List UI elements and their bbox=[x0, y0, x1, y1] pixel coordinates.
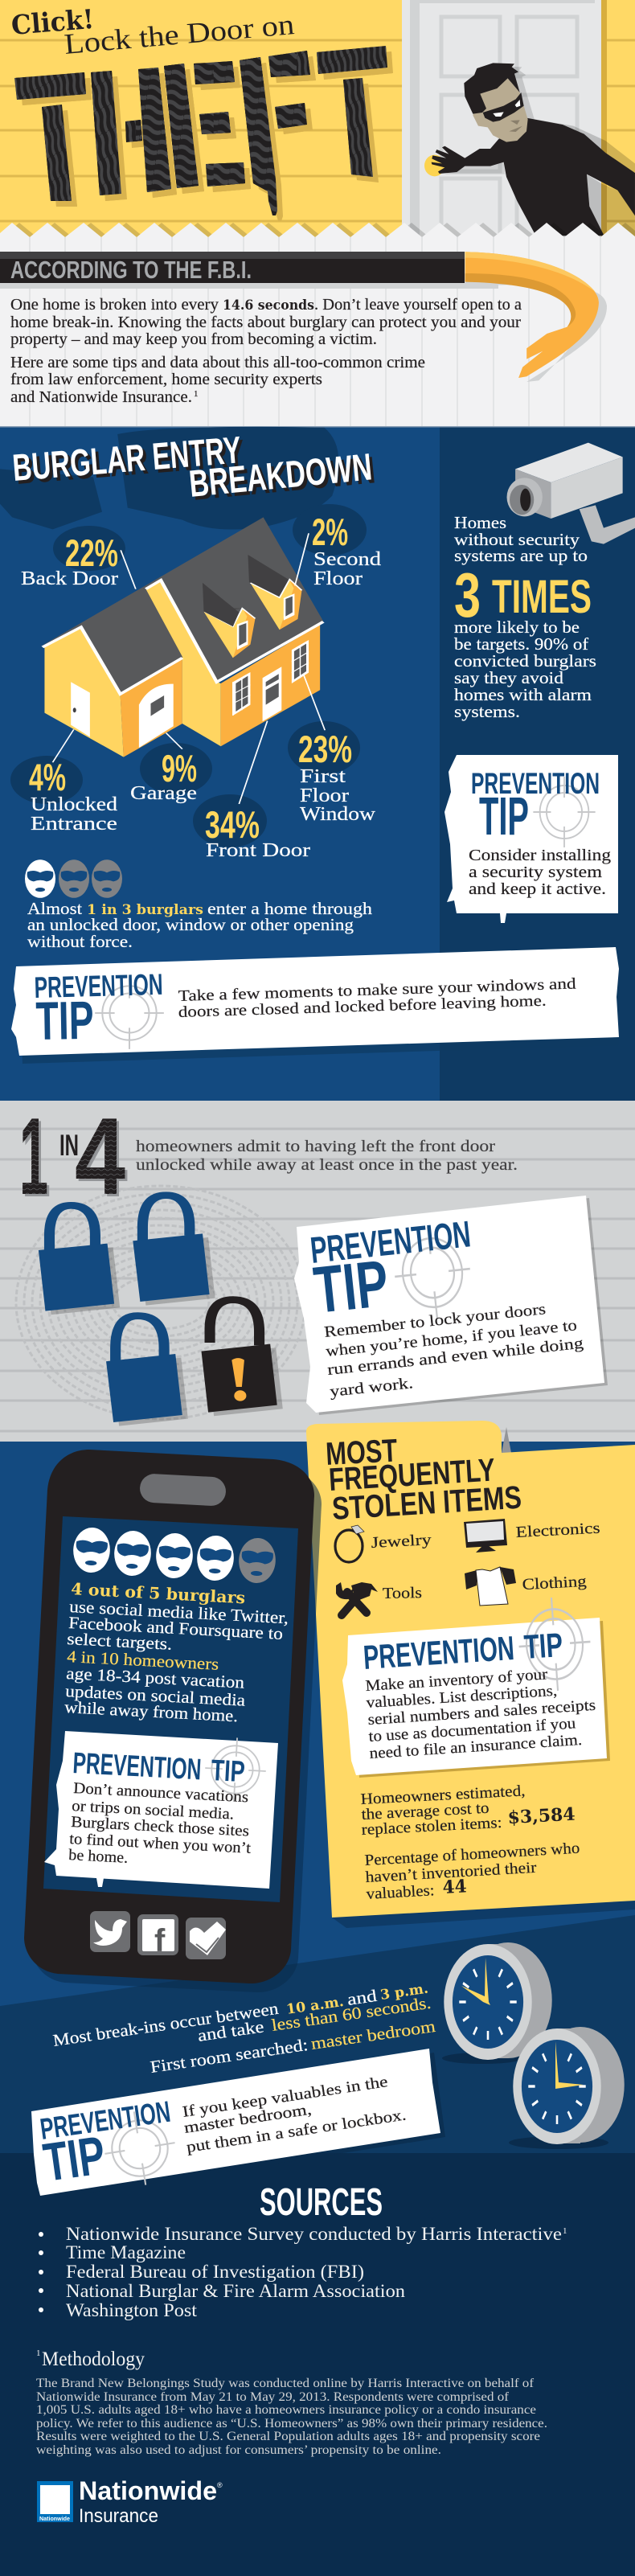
panel: prevention tip lock your doors: PREVENTION bbox=[309, 1212, 473, 1271]
entry point labels: Back Door bbox=[21, 568, 118, 589]
big number: 1 in 4 bbox=[19, 1095, 128, 1220]
text block: 3 times: systems. bbox=[454, 702, 520, 721]
big number: 1 in 4: 1 bbox=[19, 1095, 48, 1217]
text block: methodology: 1,005 U.S. adults aged 18+ who have a homeowners insurance policy or a condo insurance bbox=[36, 2403, 536, 2417]
panel: prevention tip lock your doors: yard work. bbox=[329, 1375, 414, 1401]
text block: percentage not inventoried: Percentage of homeowners who bbox=[364, 1840, 580, 1869]
text block: break-ins timing: First room searched: bbox=[149, 2035, 309, 2077]
text block: percentage not inventoried: valuables: bbox=[366, 1882, 435, 1903]
logo: Nationwide Insurance: Nationwide bbox=[39, 2517, 70, 2522]
text block: intro: and Nationwide Insurance. bbox=[10, 389, 192, 406]
heading: most frequently stolen items: STOLEN ITEMS bbox=[331, 1480, 522, 1527]
stolen item icons and labels: Tools bbox=[383, 1585, 422, 1602]
icon row: burglar masks 4 of 5 bbox=[72, 1527, 277, 1584]
panel: prevention tip windows and doors: doors are closed and locked before leaving home. bbox=[178, 993, 547, 1021]
panel: prevention tip safe or lockbox: put them in a safe or lockbox. bbox=[186, 2106, 408, 2156]
entry point labels: Second bbox=[313, 549, 381, 570]
title: THEFT: T bbox=[21, 49, 91, 248]
text block: 3 times: homes with alarm bbox=[454, 685, 592, 704]
text block: intro bbox=[10, 297, 522, 406]
panel: prevention tip inventory: need to file an insurance claim. bbox=[369, 1732, 583, 1762]
text block: social media: select targets. bbox=[67, 1629, 173, 1654]
text block: intro: property – and may keep you from becoming a victim. bbox=[10, 331, 377, 348]
list: sources: Washington Post bbox=[66, 2300, 198, 2320]
text block: break-ins timing: less than 60 seconds. bbox=[270, 1993, 432, 2035]
text block: social media: updates on social media bbox=[65, 1681, 246, 1710]
panel: prevention tip vacations: to find out when you won’t bbox=[69, 1831, 252, 1857]
heading: Burglar Entry Breakdown: BURGLAR ENTRY bbox=[14, 431, 246, 492]
big number: 1 in 4: 4 bbox=[77, 1097, 128, 1220]
text block: cost to replace bbox=[360, 1782, 576, 1839]
text block: cost to replace: replace stolen items: bbox=[361, 1815, 502, 1839]
text block: 3 times: systems are up to bbox=[454, 546, 588, 565]
list: sources: Federal Bureau of Investigation (FBI) bbox=[66, 2262, 364, 2282]
entry point labels: Entrance bbox=[31, 814, 117, 835]
title: THEFT: H bbox=[86, 39, 186, 242]
panel: prevention tip windows and doors: Take a few moments to make sure your windows and bbox=[178, 975, 576, 1005]
panel: prevention tip safe or lockbox: PREVENTION bbox=[38, 2095, 173, 2146]
panel: 1 in 4 grey siding background bbox=[0, 1101, 635, 1442]
panel: prevention tip inventory: serial numbers and sales receipts bbox=[367, 1697, 596, 1729]
text block: homeowners admit: unlocked while away at least once in the past year. bbox=[136, 1157, 518, 1174]
icons: twitter, facebook, foursquare bbox=[93, 1919, 226, 1959]
heading: Burglar Entry Breakdown: BREAKDOWN bbox=[187, 445, 374, 505]
percentage labels: 2% bbox=[312, 511, 348, 553]
list: sources: National Burglar & Fire Alarm Association bbox=[66, 2281, 406, 2301]
text block: break-ins timing bbox=[51, 1981, 436, 2077]
title: THEFT bbox=[14, 46, 393, 220]
text block: 1 in 3 burglars: enter a home through bbox=[207, 899, 373, 918]
panel: prevention tip windows and doors: TIP bbox=[35, 991, 94, 1052]
title: THEFT: T bbox=[15, 43, 85, 242]
list: sources: Time Magazine bbox=[66, 2242, 186, 2262]
big number: 1 in 4: 1 bbox=[22, 1097, 51, 1220]
stolen item icons and labels bbox=[335, 1519, 600, 1615]
panel: prevention tip vacations bbox=[44, 1731, 278, 1889]
text block: methodology bbox=[36, 2348, 547, 2457]
fingerprint spots behind percentages bbox=[10, 504, 367, 847]
panel: prevention tip lock your doors: when you’re home, if you leave to bbox=[325, 1317, 578, 1360]
list: sources: Nationwide Insurance Survey conducted by Harris Interactive bbox=[66, 2224, 562, 2244]
text block: social media: 4 out of 5 burglars bbox=[71, 1579, 246, 1607]
panel: prevention tip lock your doors: Remember to lock your doors bbox=[323, 1301, 547, 1341]
title: THEFT: E bbox=[151, 31, 248, 228]
text block: percentage not inventoried: 44 bbox=[442, 1876, 467, 1898]
text block: break-ins timing: master bedroom bbox=[309, 2016, 436, 2053]
title: THEFT: F bbox=[227, 15, 315, 232]
text block: 3 times: more likely to be bbox=[454, 617, 580, 637]
illustration: white picket fence bbox=[0, 223, 635, 426]
text block: homeowners admit: homeowners admit to having left the front door bbox=[136, 1138, 496, 1155]
panel: prevention tip inventory: valuables. List descriptions, bbox=[366, 1683, 558, 1712]
text block: 3 times: be targets. 90% of bbox=[454, 634, 588, 654]
text block: social media: use social media like Twitter, bbox=[69, 1597, 289, 1627]
text block: methodology: policy. We refer to this audience as “U.S. Homeowners” as 98% own their primary residence. bbox=[36, 2417, 547, 2430]
title: Click! Lock the Door on: Click! bbox=[10, 3, 95, 41]
heading: most frequently stolen items: MOST bbox=[325, 1433, 398, 1472]
panel: prevention tip inventory: TIP bbox=[523, 1626, 563, 1666]
text block: 1 in 3 burglars bbox=[27, 899, 373, 951]
text block: methodology: Methodology bbox=[42, 2348, 145, 2370]
heading: most frequently stolen items bbox=[325, 1433, 522, 1527]
text block: homeowners admit bbox=[136, 1138, 518, 1174]
icon row: burglar masks 1 in 3 bbox=[25, 859, 122, 898]
text block: break-ins timing: and take bbox=[196, 2016, 265, 2045]
illustration: large fingerprint bbox=[16, 1186, 305, 1419]
panel: yellow siding header bbox=[0, 0, 635, 312]
text block: intro: 1 bbox=[194, 389, 198, 399]
panel: prevention tip vacations: or trips on social media. bbox=[72, 1798, 235, 1823]
logo: Nationwide Insurance bbox=[37, 2476, 223, 2527]
logo: Nationwide Insurance: ® bbox=[217, 2481, 223, 2489]
panel: social media blue background bbox=[0, 1442, 635, 2576]
text block: social media: while away from home. bbox=[64, 1697, 239, 1725]
text block: break-ins timing: Most break-ins occur between bbox=[51, 1999, 280, 2050]
title: Click! Lock the Door on bbox=[10, 3, 296, 60]
entry point labels: Unlocked bbox=[31, 794, 117, 815]
text block: social media: age 18-34 post vacation bbox=[66, 1663, 245, 1692]
text block: 3 times: without security bbox=[454, 530, 580, 549]
icon: padlocks bbox=[39, 1196, 283, 1426]
panel: prevention tip security system bbox=[444, 755, 618, 923]
panel: prevention tip inventory: Make an inventory of your bbox=[365, 1666, 548, 1695]
heading: Burglar Entry Breakdown bbox=[11, 428, 377, 508]
panel: prevention tip safe or lockbox: If you keep valuables in the bbox=[182, 2074, 389, 2121]
text block: methodology: The Brand New Belongings Study was conducted online by Harris Interactive on behalf of bbox=[36, 2377, 535, 2390]
text block: methodology: Nationwide Insurance from May 21 to May 29, 2013. Respondents were comprised of bbox=[36, 2390, 510, 2404]
panel: prevention tip security system: a security system bbox=[469, 864, 602, 881]
text block: percentage not inventoried bbox=[364, 1840, 580, 1903]
entry point labels: Floor bbox=[300, 786, 349, 806]
text block: intro: 14.6 seconds bbox=[223, 297, 314, 314]
entry point labels: First bbox=[300, 766, 346, 787]
stolen item icons and labels: Electronics bbox=[515, 1520, 600, 1541]
heading: Burglar Entry Breakdown: BREAKDOWN bbox=[190, 448, 377, 508]
text block: intro: One home is broken into every bbox=[10, 297, 219, 314]
percentage labels: 22% bbox=[65, 531, 118, 574]
text block: methodology: 1 bbox=[36, 2348, 40, 2358]
title: Click! Lock the Door on: Lock the Door on bbox=[63, 8, 296, 60]
text block: 1 in 3 burglars: without force. bbox=[27, 932, 133, 951]
icon: clocks bbox=[442, 1942, 625, 2149]
heading: Burglar Entry Breakdown: BURGLAR ENTRY bbox=[11, 428, 243, 489]
big number: 1 in 4: 4 bbox=[75, 1095, 125, 1217]
text block: percentage not inventoried: haven’t inventoried their bbox=[365, 1860, 537, 1886]
percentage labels: 34% bbox=[205, 803, 260, 846]
title: THEFT: H bbox=[80, 34, 180, 236]
text block: cost to replace: $3,584 bbox=[507, 1804, 576, 1828]
percentage labels: 23% bbox=[298, 728, 352, 770]
entry point labels: Front Door bbox=[206, 840, 310, 861]
entry point labels: Garage bbox=[130, 783, 197, 804]
stolen item icons and labels: Jewelry bbox=[371, 1532, 432, 1552]
logo: Nationwide Insurance: Nationwide bbox=[79, 2476, 217, 2505]
text block: intro: . Don’t leave yourself open to a bbox=[314, 297, 522, 314]
panel: prevention tip safe or lockbox: TIP bbox=[40, 2125, 109, 2193]
panel: prevention tip windows and doors bbox=[11, 947, 619, 1064]
entry point labels bbox=[21, 549, 381, 861]
text block: 3 times: convicted burglars bbox=[454, 651, 596, 671]
title: THEFT: F bbox=[233, 21, 321, 237]
panel: prevention tip inventory: PREVENTION bbox=[363, 1629, 515, 1676]
panel: prevention tip vacations: TIP bbox=[211, 1754, 246, 1788]
crowbar: According to the F.B.I. banner: ACCORDING TO THE F.B.I. bbox=[10, 256, 252, 284]
text block: break-ins timing: 3 p.m. bbox=[379, 1981, 429, 2004]
entry point labels: Window bbox=[300, 804, 376, 825]
heading: most frequently stolen items: FREQUENTLY bbox=[328, 1452, 496, 1498]
entry point labels: Floor bbox=[313, 568, 363, 589]
panel: prevention tip windows and doors: PREVENTION bbox=[34, 968, 163, 1004]
house illustration bbox=[40, 517, 323, 757]
panel: prevention tip safe or lockbox bbox=[31, 2049, 445, 2200]
panel: yellow stolen items bbox=[306, 1421, 635, 1928]
list: sources bbox=[39, 2224, 567, 2320]
text block: methodology: Results were weighted to the U.S. General Population adults ages 18+ and propensity score bbox=[36, 2430, 540, 2443]
text block: social media: Facebook and Foursquare to bbox=[68, 1613, 284, 1643]
text block: cost to replace: the average cost to bbox=[361, 1800, 490, 1823]
title: THEFT: T bbox=[317, 14, 387, 218]
text block: cost to replace: Homeowners estimated, bbox=[360, 1782, 526, 1808]
heading: sources: SOURCES bbox=[260, 2181, 383, 2224]
text block: 3 times bbox=[454, 513, 596, 721]
panel: prevention tip lock your doors: run errands and even while doing bbox=[326, 1335, 584, 1379]
leader lines bbox=[53, 533, 325, 804]
title: THEFT: E bbox=[157, 36, 254, 234]
panel: prevention tip security system: TIP bbox=[479, 786, 529, 847]
text block: break-ins timing: and bbox=[346, 1986, 379, 2009]
panel: prevention tip vacations: be home. bbox=[68, 1847, 129, 1867]
illustration: smartphone bbox=[24, 1450, 322, 1992]
text block: social media bbox=[64, 1579, 289, 1725]
text block: 1 in 3 burglars: Almost bbox=[27, 899, 82, 918]
crowbar: According to the F.B.I. banner bbox=[0, 252, 607, 382]
text block: intro: home break-in. Knowing the facts about burglary can protect you and your bbox=[10, 314, 522, 331]
panel: prevention tip lock your doors bbox=[294, 1196, 608, 1415]
text block: break-ins timing: 10 a.m. bbox=[285, 1994, 345, 2018]
text block: 1 in 3 burglars: an unlocked door, window or other opening bbox=[27, 915, 354, 934]
text block: 3 times: Homes bbox=[454, 513, 506, 532]
panel: prevention tip security system: and keep it active. bbox=[469, 881, 606, 898]
percentage labels bbox=[29, 511, 352, 846]
panel: prevention tip inventory bbox=[342, 1595, 610, 1778]
list: sources: 1 bbox=[563, 2226, 567, 2236]
panel: prevention tip inventory: to use as documentation if you bbox=[368, 1715, 576, 1745]
title: THEFT: T bbox=[322, 19, 392, 224]
text block: 3 times: TIMES bbox=[492, 571, 592, 623]
stolen item icons and labels: Clothing bbox=[522, 1573, 587, 1594]
percentage labels: 9% bbox=[162, 747, 197, 790]
big number: 1 in 4: IN bbox=[59, 1129, 79, 1162]
panel: prevention tip vacations: PREVENTION bbox=[72, 1746, 203, 1786]
text block: 1 in 3 burglars: 1 in 3 burglars bbox=[87, 902, 203, 918]
panel: prevention tip vacations: Don’t announce vacations bbox=[73, 1780, 249, 1806]
text block: 3 times: say they avoid bbox=[454, 668, 564, 687]
illustration: burglar at the door bbox=[424, 63, 635, 241]
percentage labels: 4% bbox=[29, 756, 66, 798]
logo: Nationwide Insurance: Insurance bbox=[79, 2505, 158, 2527]
panel: prevention tip vacations: Burglars check those sites bbox=[71, 1814, 250, 1840]
panel: prevention tip lock your doors: TIP bbox=[310, 1247, 391, 1327]
panel: burglar entry breakdown background bbox=[0, 426, 635, 1101]
panel: prevention tip safe or lockbox: master bedroom, bbox=[183, 2102, 313, 2137]
text block: intro: Here are some tips and data about this all-too-common crime bbox=[10, 355, 425, 371]
text block: 3 times: 3 bbox=[454, 560, 481, 630]
icon: security camera bbox=[507, 443, 635, 544]
text block: intro: from law enforcement, home security experts bbox=[10, 371, 322, 388]
text block: social media: 4 in 10 homeowners bbox=[67, 1647, 219, 1674]
text block: methodology: weighting was also used to adjust for consumers’ propensity to be online. bbox=[36, 2443, 441, 2457]
panel: prevention tip security system: Consider installing bbox=[469, 847, 611, 864]
icons: twitter, facebook, foursquare: f bbox=[154, 1923, 166, 1959]
illustration: white door bbox=[402, 0, 607, 241]
